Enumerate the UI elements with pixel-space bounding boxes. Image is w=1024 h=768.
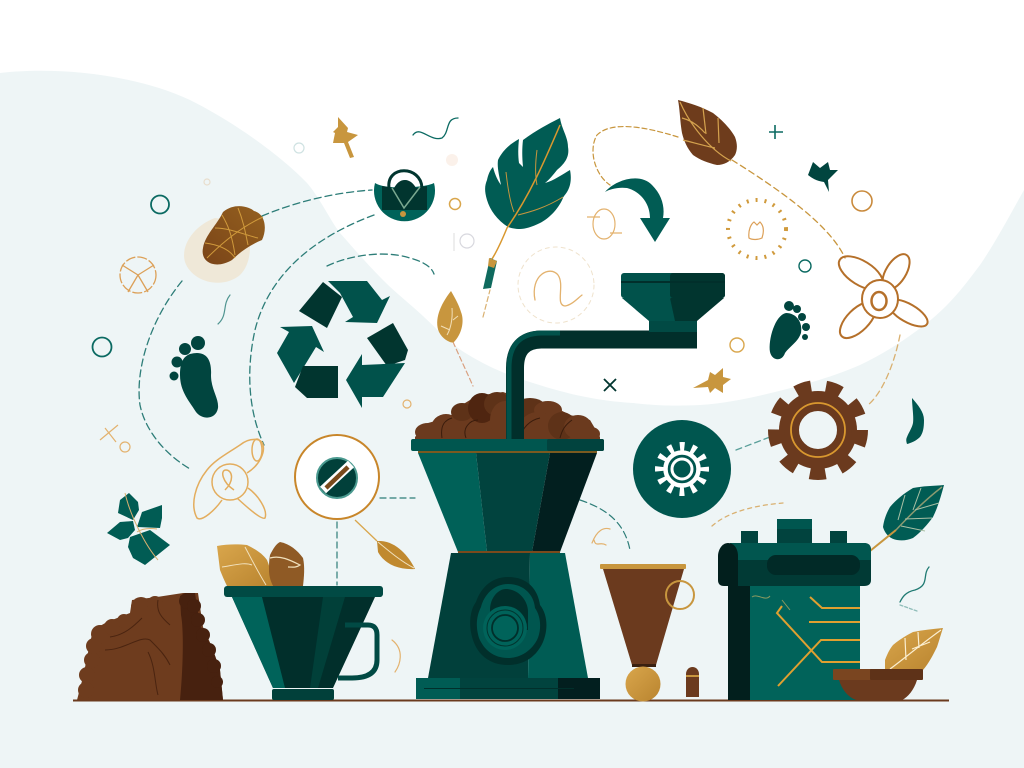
icon: handbag circle	[374, 171, 435, 221]
medallion	[470, 577, 546, 665]
dashed connectors	[139, 118, 929, 672]
icon: brown bowl	[833, 669, 923, 700]
grinder	[411, 273, 725, 699]
icon: small gold leaf	[355, 520, 415, 569]
icon: gold leaf on stem	[437, 291, 463, 343]
icon: small teal plant	[808, 162, 838, 192]
leaf and bean on dripper	[217, 542, 304, 586]
icon: bean badge	[295, 435, 379, 519]
hopper rim	[411, 439, 604, 451]
icon: sun dotted ring	[728, 200, 786, 258]
icon: left footprint	[170, 336, 218, 418]
icon: teal leaf right	[870, 485, 944, 551]
icon: teal crescent leaf	[906, 398, 924, 444]
circuit lines	[777, 597, 860, 686]
icon: large teal leaf	[483, 118, 571, 289]
icon: recycle symbol	[277, 281, 408, 408]
icon: teal four-petal leaf	[107, 493, 170, 565]
battery shaped container	[718, 519, 871, 700]
icon: coffee grounds pile	[77, 593, 223, 700]
small rings	[92, 125, 872, 452]
grinder foot	[416, 678, 600, 699]
icon: brown leaf	[678, 100, 737, 165]
icon: brown seed lump	[184, 206, 265, 283]
icon: hand-drawn pretzel outline	[194, 439, 266, 519]
icon: gold leaf in bowl	[885, 628, 943, 670]
icon: curved arrow	[605, 178, 670, 242]
ground line	[73, 700, 949, 702]
pipe	[509, 333, 697, 439]
icon: outlined shape with feet	[587, 209, 622, 239]
icon: right footprint	[770, 301, 810, 359]
icon: teal gear badge	[633, 420, 731, 518]
icon: small gold tree	[333, 117, 358, 158]
coffee beans heap	[415, 392, 600, 443]
icon: gold star	[693, 368, 731, 393]
icon: wheel line drawing	[120, 257, 156, 293]
icon: orbit flower	[833, 250, 932, 344]
icon: pour-over dripper	[217, 542, 383, 700]
upper hopper	[418, 451, 597, 553]
icon: brown filter cone	[600, 564, 694, 702]
grinder base	[428, 553, 588, 678]
icon: small brown pill	[686, 667, 699, 697]
funnel	[621, 273, 725, 332]
icon: brown gear	[776, 388, 860, 472]
